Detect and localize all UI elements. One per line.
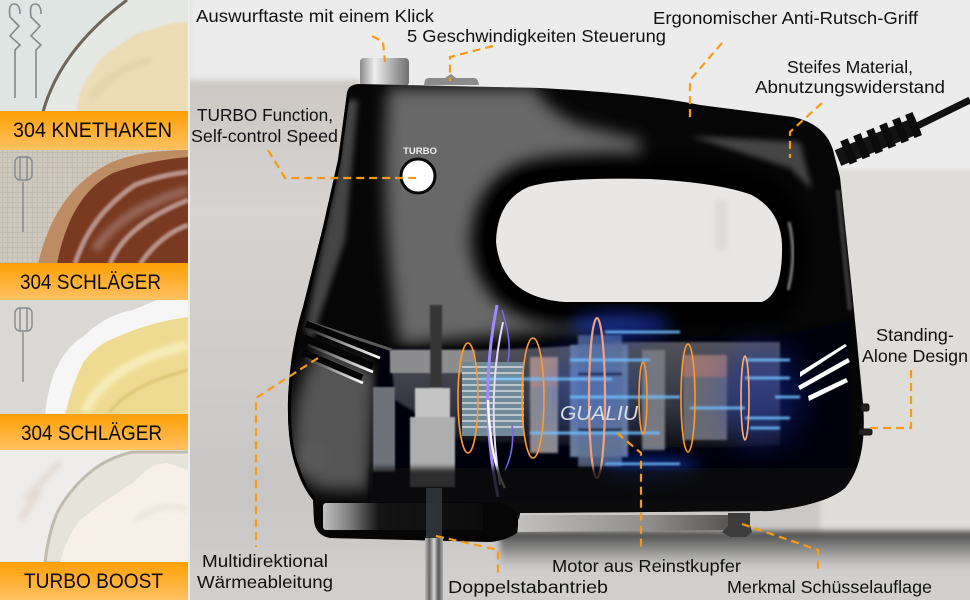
callout: bowl rest	[727, 524, 932, 597]
beater shaft	[425, 488, 443, 600]
base left	[313, 502, 517, 542]
panel: cream	[0, 450, 190, 600]
vents left	[302, 322, 392, 383]
callout: copper motor: Motor aus Reinstkupfer	[552, 556, 741, 576]
callout: material	[755, 57, 945, 158]
label bar: 304 Knethaken	[0, 111, 188, 150]
mixer body	[288, 84, 864, 542]
callout: speed control	[407, 26, 666, 81]
callout: standing design: Standing-	[876, 325, 954, 345]
callout: speed control: 5 Geschwindigkeiten Steuerung	[407, 26, 666, 46]
callout: turbo: TURBO Function,	[197, 105, 333, 125]
lens mark	[300, 440, 330, 470]
callout: ejector button	[196, 6, 434, 62]
lower body shade	[370, 468, 860, 518]
icon: whisk beater	[15, 308, 32, 382]
callout: material: Abnutzungswiderstand	[755, 77, 945, 97]
callout: heat dissipation: Wärmeableitung	[197, 572, 333, 592]
callout: standing design: Alone Design	[862, 346, 968, 366]
callout: twin rod drive: Doppelstabantrieb	[448, 577, 608, 597]
callout: heat dissipation	[197, 358, 333, 592]
callout: grip: Ergonomischer Anti-Rutsch-Griff	[653, 8, 918, 28]
foot	[722, 513, 752, 537]
callout: copper motor	[552, 433, 741, 576]
callout: twin rod drive	[436, 536, 608, 597]
icon: whisk beater	[15, 157, 32, 232]
icon: dough hooks	[10, 4, 41, 98]
callout: ejector button: Auswurftaste mit einem Klick	[196, 6, 434, 26]
gearbox parts	[373, 305, 475, 487]
label bar: 304 Knethaken: 304 KNETHAKEN	[13, 119, 172, 142]
transparent motor section	[288, 93, 860, 518]
side pegs	[859, 404, 872, 435]
label bar: 304 Schläger: 304 SCHLÄGER	[20, 271, 161, 294]
panel: kneading hooks	[0, 0, 188, 150]
base plate	[518, 515, 740, 532]
copper rings	[458, 318, 749, 478]
violet ring	[488, 305, 513, 497]
motor fins	[462, 362, 524, 436]
label bar: Turbo Boost	[0, 562, 188, 600]
label bar: 304 Schläger	[0, 414, 188, 450]
callout: material: Steifes Material,	[787, 57, 913, 77]
turbo button	[401, 146, 437, 193]
ejector button	[360, 58, 409, 86]
brand name: GUALIU	[560, 403, 639, 425]
body edge line	[288, 93, 347, 500]
callout: grip	[653, 8, 918, 118]
panel: chocolate beater	[0, 150, 188, 300]
label bar: 304 Schläger	[0, 263, 188, 300]
label bar: 304 Schläger: 304 SCHLÄGER	[21, 422, 162, 445]
power cord	[838, 100, 970, 158]
callout: heat dissipation: Multidirektional	[202, 551, 328, 571]
callout: turbo: Self-control Speed	[191, 126, 338, 146]
speed switch	[424, 74, 479, 85]
label bar: Turbo Boost: TURBO BOOST	[24, 570, 163, 593]
vents right	[798, 344, 850, 401]
blue glow	[480, 311, 800, 482]
handle opening	[495, 178, 783, 303]
body reflections	[292, 88, 850, 490]
panel: butter beater	[0, 300, 188, 450]
callout: standing design	[862, 325, 968, 428]
motor rotor and copper	[530, 335, 727, 467]
callout: bowl rest: Merkmal Schüsselauflage	[727, 577, 932, 597]
callout: turbo	[191, 105, 416, 178]
turbo button: TURBO	[403, 146, 437, 157]
ring highlights around handle	[788, 222, 793, 290]
